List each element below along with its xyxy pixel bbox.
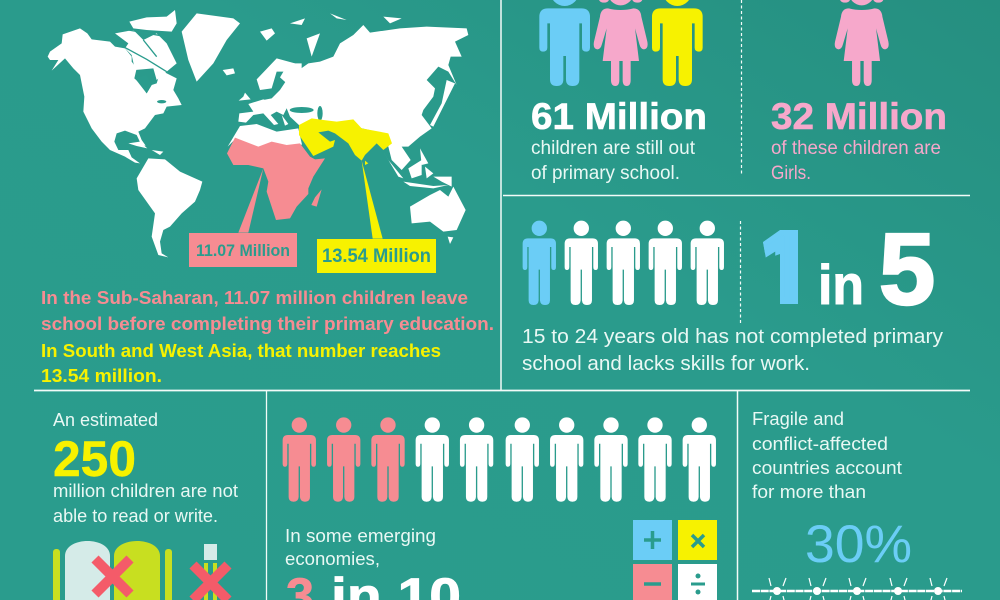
- panel: fragile countries: [752, 409, 962, 600]
- text: map caption: In the Sub-Saharan, 11.07 million children leave: [41, 287, 468, 308]
- panel: 3 in 10: [283, 417, 717, 600]
- callout: 11.07 Million: [189, 233, 297, 267]
- icon: ten people: [283, 417, 716, 502]
- text: of these children: Girls.: [771, 163, 811, 184]
- inland seas: [123, 30, 323, 121]
- text: map caption: school before completing their primary education.: [41, 313, 494, 334]
- stat: 61 Million: 61 Million: [531, 96, 707, 137]
- callout: 13.54 Million: [317, 239, 436, 273]
- text: An estimated: An estimated: [53, 410, 158, 430]
- text: cannot read or write: [53, 481, 238, 526]
- stat: 1 in 5: 1: [755, 209, 814, 327]
- icon: barbed wire: [752, 578, 962, 600]
- panel: 1 in 5: [522, 220, 943, 370]
- icon: five people: [523, 221, 724, 305]
- text: map caption: In South and West Asia, that number reaches: [41, 340, 441, 361]
- panel: 61 million children: [531, 0, 707, 184]
- stat: 250: 250: [53, 431, 136, 487]
- text: map caption: [41, 287, 494, 386]
- stat: 1 in 5: in: [818, 253, 864, 316]
- text: out of school: of primary school.: [531, 163, 680, 184]
- text: fragile and conflict-affected: conflict-affected: [752, 434, 888, 454]
- panel: 250 million: [53, 410, 238, 600]
- callout: 11.07 Million: 11.07 Million: [196, 241, 290, 260]
- text: emerging economies: In some emerging: [285, 526, 436, 546]
- stat: 32 Million: 32 Million: [771, 96, 947, 137]
- text: cannot read or write: able to read or write.: [53, 506, 218, 526]
- text: map caption: 13.54 million.: [41, 365, 162, 386]
- callout: 13.54 Million: 13.54 Million: [322, 246, 431, 267]
- region: South and West Asia: [299, 118, 392, 239]
- text: fragile and conflict-affected: countries account: [752, 458, 902, 478]
- icon: girl: [835, 0, 889, 86]
- text: 15 to 24 years old: 15 to 24 years old has not completed primary: [522, 326, 943, 348]
- text: cannot read or write: million children are not: [53, 481, 238, 501]
- icon: three children: [539, 0, 703, 86]
- text: fragile and conflict-affected: Fragile and: [752, 409, 844, 429]
- icon: crossed-out book: [53, 541, 172, 600]
- panel: world map: [48, 10, 468, 273]
- text: out of school: children are still out: [531, 138, 696, 159]
- text: fragile and conflict-affected: [752, 409, 902, 502]
- text: out of school: [531, 138, 696, 184]
- text: 15 to 24 years old: [522, 326, 943, 375]
- stat: 1 in 5: [763, 230, 934, 306]
- text: of these children: [771, 138, 941, 184]
- icon: math operators: [633, 520, 717, 600]
- region: Sub-Saharan Africa: [227, 138, 325, 233]
- text: 15 to 24 years old: school and lacks skills for work.: [522, 353, 810, 375]
- stat: 1 in 5: 5: [879, 214, 935, 326]
- stat: 30%: 30%: [805, 515, 912, 574]
- text: of these children: of these children are: [771, 138, 941, 159]
- panel: 32 million girls: [771, 0, 947, 184]
- world map continents: [48, 10, 468, 257]
- stat: 3 in 10: [286, 568, 461, 600]
- icon: crossed-out pencil: [193, 544, 228, 600]
- text: emerging economies: economies,: [285, 549, 380, 569]
- text: emerging economies: [285, 526, 436, 569]
- text: fragile and conflict-affected: for more than: [752, 482, 866, 502]
